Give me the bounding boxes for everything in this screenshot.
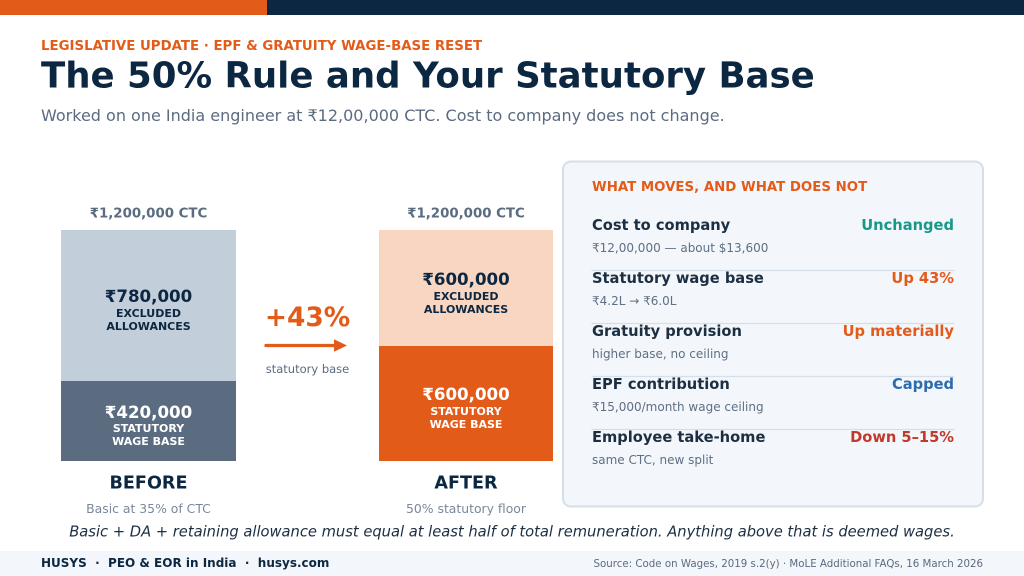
after bar: excluded allowances: EXCLUDED: [433, 290, 499, 303]
after bar: statutory wage base: ₹600,000: [422, 385, 510, 404]
subtitle: Worked on one India engineer at ₹12,00,000 CTC. Cost to company does not change.: [41, 106, 725, 125]
before bar: statutory wage base: [61, 381, 236, 461]
row: statutory wage base: ₹4.2L → ₹6.0L: [592, 294, 677, 308]
title: The 50% Rule and Your Statutory Base: [41, 56, 815, 96]
panel: after column: [379, 206, 553, 516]
after bar: statutory wage base: STATUTORY: [430, 405, 503, 418]
footer brand: HUSYS · PEO & EOR in India · husys.com: [41, 556, 329, 570]
row: epf contribution: EPF contribution: [592, 376, 730, 393]
row: gratuity provision: Up materially: [843, 323, 954, 340]
before bar: statutory wage base: STATUTORY: [113, 422, 185, 435]
arrow caption: statutory base: [266, 362, 349, 376]
before bar: statutory wage base: WAGE BASE: [112, 435, 185, 448]
row: epf contribution: [592, 376, 954, 414]
row: employee take-home: same CTC, new split: [592, 453, 714, 467]
arrow: [266, 339, 347, 352]
footer source: Source: Code on Wages, 2019 s.2(y) · MoLE Additional FAQs, 16 March 2026: [594, 558, 983, 570]
row: employee take-home: Employee take-home: [592, 429, 765, 446]
before heading: BEFORE: [110, 474, 187, 494]
after bar: statutory wage base: WAGE BASE: [430, 418, 502, 431]
row: statutory wage base: Up 43%: [891, 270, 954, 287]
row: employee take-home: [592, 429, 954, 467]
row: gratuity provision: higher base, no ceiling: [592, 347, 728, 361]
footer: [0, 551, 1024, 576]
row: gratuity provision: [592, 323, 954, 361]
row: statutory wage base: Statutory wage base: [592, 270, 764, 287]
row: cost to company: ₹12,00,000 — about $13,600: [592, 241, 768, 255]
footer background: [0, 551, 1024, 576]
before bar: excluded allowances: [61, 230, 236, 381]
row: epf contribution: ₹15,000/month wage ceiling: [592, 400, 764, 414]
after note: 50% statutory floor: [406, 501, 527, 516]
takeaway statement: Basic + DA + retaining allowance must equal at least half of total remuneration. Anything above that is deemed wages.: [69, 524, 955, 540]
panel heading: WHAT MOVES, AND WHAT DOES NOT: [592, 180, 868, 195]
row: statutory wage base: [592, 270, 954, 308]
after bar: statutory wage base: [379, 346, 553, 461]
change callout: [265, 302, 350, 376]
before note: Basic at 35% of CTC: [86, 501, 211, 516]
panel background: [563, 162, 983, 506]
panel: before column: [61, 206, 236, 516]
row: cost to company: [592, 217, 954, 255]
row: epf contribution: Capped: [892, 376, 954, 393]
before bar: statutory wage base: ₹420,000: [105, 403, 192, 422]
before bar: excluded allowances: ₹780,000: [105, 287, 192, 306]
after heading: AFTER: [434, 474, 498, 494]
eyebrow: LEGISLATIVE UPDATE · EPF & GRATUITY WAGE-BASE RESET: [41, 39, 483, 54]
after bar: excluded allowances: ₹600,000: [422, 270, 510, 289]
row: cost to company: Unchanged: [861, 217, 954, 234]
row: cost to company: Cost to company: [592, 217, 731, 234]
panel: what moves: [563, 162, 983, 506]
before total label: ₹1,200,000 CTC: [90, 206, 207, 222]
after bar: excluded allowances: [379, 230, 553, 346]
before bar: excluded allowances: EXCLUDED: [116, 307, 181, 320]
row: gratuity provision: Gratuity provision: [592, 323, 742, 340]
row: employee take-home: Down 5–15%: [850, 429, 954, 446]
top accent bar: [0, 0, 1024, 15]
percent change: +43%: [265, 302, 350, 333]
after total label: ₹1,200,000 CTC: [407, 206, 525, 222]
after bar: excluded allowances: ALLOWANCES: [424, 303, 508, 316]
before bar: excluded allowances: ALLOWANCES: [106, 320, 191, 333]
